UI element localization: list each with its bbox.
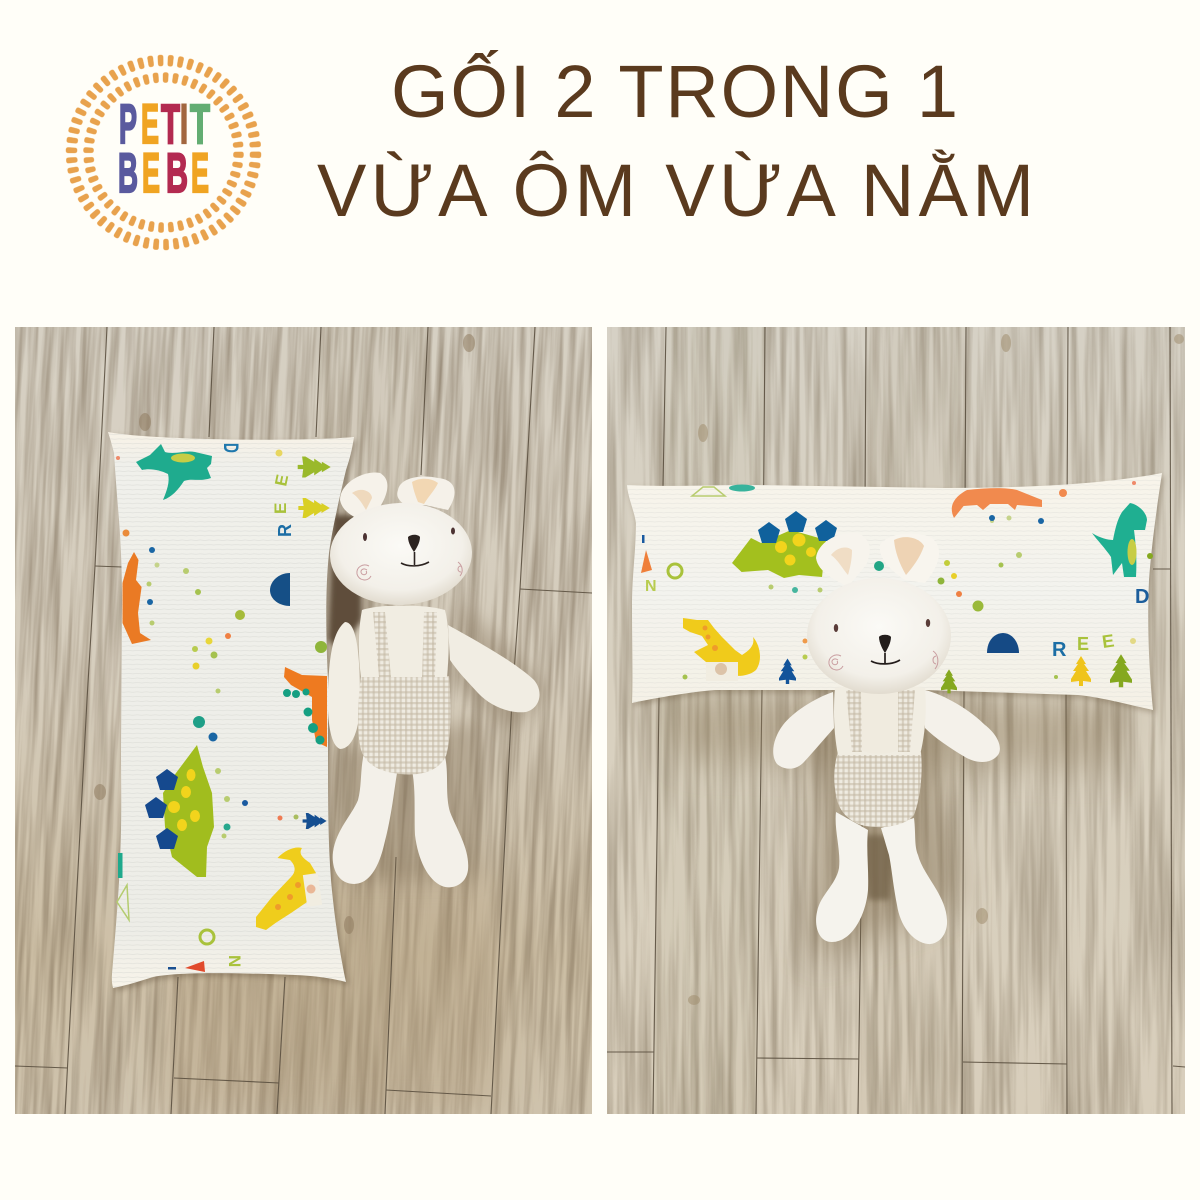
croc label right xyxy=(706,662,738,681)
tree yellow xyxy=(298,498,330,518)
rabbit overalls xyxy=(358,676,451,774)
rabbit ear left xyxy=(340,473,387,520)
logo: Petit Bebe xyxy=(72,60,256,244)
logo word PETIT xyxy=(119,92,210,155)
logo word PETIT: T xyxy=(190,92,210,155)
dome navy right xyxy=(987,633,1019,653)
teal stripe and triangle xyxy=(117,853,129,920)
letter D right: D xyxy=(1135,586,1149,608)
stego plates left xyxy=(145,769,178,849)
logo word PETIT: E xyxy=(141,92,159,155)
rabbit bib right-photo xyxy=(860,690,898,754)
triangles right xyxy=(641,484,755,573)
rabbit face right-photo xyxy=(829,619,938,670)
croc spots right xyxy=(702,626,718,651)
dino orange croc right xyxy=(952,488,1042,518)
rabbit chest xyxy=(359,606,449,677)
title line 1: GỐI 2 TRONG 1 xyxy=(391,50,958,133)
dome navy xyxy=(270,573,290,606)
rabbit straps xyxy=(373,612,437,677)
rabbit arm right right-photo xyxy=(925,690,1000,762)
dino teal right xyxy=(1092,503,1147,577)
letter R right: R xyxy=(1052,639,1067,661)
rabbit leg left right-photo xyxy=(816,812,868,942)
rabbit overalls right-photo xyxy=(834,752,922,827)
stego spots right xyxy=(775,534,816,566)
tree green xyxy=(298,456,331,478)
title xyxy=(317,50,1034,232)
rabbit ear left right-photo xyxy=(816,533,870,587)
scattered small marks xyxy=(116,450,327,838)
letter E lower: E xyxy=(271,503,290,514)
rabbit arm left right-photo xyxy=(773,692,834,769)
rabbit left xyxy=(328,473,540,887)
rabbit face xyxy=(357,528,462,580)
letter A navy mark xyxy=(168,967,176,970)
dino orange right xyxy=(284,667,327,747)
dino yellow croc right xyxy=(683,618,760,676)
rabbit arm right xyxy=(448,625,540,712)
dino teal belly xyxy=(171,454,195,462)
rabbit ear right right-photo xyxy=(880,534,939,583)
rabbit leg right right-photo xyxy=(881,818,947,944)
title line 2: VỪA ÔM VỪA NẰM xyxy=(317,149,1034,232)
letter O xyxy=(200,930,214,944)
shadows left xyxy=(111,435,550,991)
letter E upper: E xyxy=(271,473,292,488)
tree navy xyxy=(303,813,327,829)
letter D: D xyxy=(219,443,243,453)
rabbit head right-photo xyxy=(807,578,951,694)
letter O right xyxy=(668,564,682,578)
letter R: R xyxy=(275,524,295,537)
dino orange long xyxy=(122,552,151,644)
trees right xyxy=(779,654,1132,693)
rabbit chest right-photo xyxy=(834,685,926,755)
stego plates right xyxy=(758,511,837,543)
rabbit left leg xyxy=(333,753,398,884)
scattered small marks right xyxy=(682,481,1153,680)
rabbit ear right xyxy=(397,476,455,510)
logo word BEBE: B xyxy=(118,141,138,204)
pillow right xyxy=(627,473,1162,710)
letter E right 2: E xyxy=(1101,630,1115,652)
red triangle xyxy=(185,961,205,972)
logo word BEBE xyxy=(118,141,209,204)
letter N: N xyxy=(225,955,244,967)
dino teal xyxy=(136,444,212,500)
rabbit right xyxy=(773,533,1000,944)
dino yellow croc left xyxy=(256,847,316,930)
shadows right xyxy=(629,476,1164,960)
logo word PETIT: T xyxy=(161,92,180,155)
croc spots and label xyxy=(275,873,322,910)
logo sun rings xyxy=(72,60,256,244)
dino teal belly right xyxy=(1128,539,1136,565)
wood floor right xyxy=(607,327,1185,1114)
rabbit arm left xyxy=(328,622,360,749)
wood floor left xyxy=(15,327,592,1114)
panel: photo right, pillow horizontal behind rabbit xyxy=(607,327,1185,1114)
logo word BEBE: B xyxy=(166,141,188,204)
dino orange scallops xyxy=(283,688,324,744)
panel: photo left, pillow upright beside rabbit xyxy=(15,327,592,1114)
rabbit straps right-photo xyxy=(846,690,915,752)
rabbit right leg xyxy=(412,756,468,887)
pillow left xyxy=(108,432,354,988)
letter E right 1: E xyxy=(1077,634,1089,654)
logo: Petit Bebe: E xyxy=(191,141,209,204)
logo word BEBE: E xyxy=(142,141,160,204)
letter N right: N xyxy=(645,578,657,595)
dino stego left xyxy=(163,745,214,877)
rabbit head xyxy=(328,501,474,607)
dino stego right xyxy=(732,530,826,578)
stego spots left xyxy=(168,769,200,831)
logo word PETIT: P xyxy=(119,92,137,155)
logo word PETIT: I xyxy=(180,92,188,155)
